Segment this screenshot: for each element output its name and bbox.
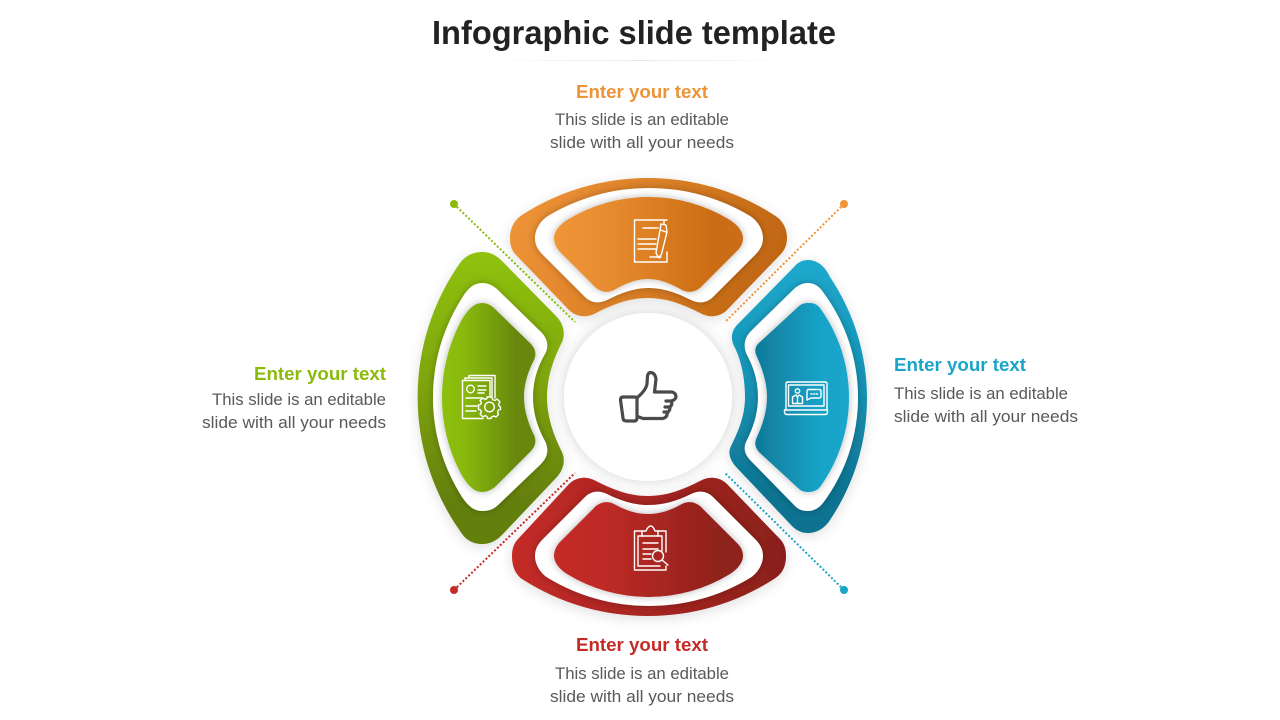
connector: orange dotted line (725, 200, 848, 322)
orange outer band (510, 178, 787, 316)
text block: top orange (550, 82, 734, 152)
title: Infographic slide template (432, 14, 836, 51)
center circle shadow ring (564, 313, 732, 481)
green white ring (433, 283, 547, 511)
text block: right blue: slide with all your needs (894, 407, 1078, 426)
red white ring (535, 492, 763, 606)
text block: left green: This slide is an editable (212, 390, 386, 409)
connector: red dotted line (450, 473, 575, 594)
text block: right blue: Enter your text (894, 355, 1026, 375)
text block: right blue (894, 355, 1078, 426)
red outer band (512, 478, 786, 616)
icon: clipboard with magnifier (634, 526, 668, 570)
icon: document and pen (634, 220, 667, 262)
text block: left green (202, 364, 386, 432)
green inner shape (442, 303, 535, 492)
text block: bottom red: Enter your text (576, 635, 708, 655)
panel: left green (418, 252, 564, 544)
connector: blue dotted line (725, 473, 848, 594)
text block: left green: Enter your text (254, 364, 386, 384)
green outer band (418, 252, 564, 544)
text block: top orange: Enter your text (576, 82, 708, 102)
text block: bottom red: This slide is an editable (555, 664, 729, 683)
panel: bottom red (512, 478, 786, 616)
icon: laptop with presenter (784, 382, 828, 414)
icon: thumbs up (620, 372, 676, 421)
text block: bottom red (550, 635, 734, 706)
orange white ring (535, 188, 763, 302)
blue inner shape (755, 303, 849, 492)
center circle (564, 313, 732, 481)
panel: right blue (729, 260, 867, 533)
text block: right blue: This slide is an editable (894, 384, 1068, 403)
connector: green dotted line (450, 200, 575, 322)
blue outer band (729, 260, 867, 533)
orange inner shape (554, 197, 743, 292)
text block: top orange: slide with all your needs (550, 133, 734, 152)
panel: top orange (510, 178, 787, 316)
icon: documents and gear (462, 376, 500, 418)
text block: bottom red: slide with all your needs (550, 687, 734, 706)
text block: top orange: This slide is an editable (555, 110, 729, 129)
blue white ring (745, 283, 858, 511)
red inner shape (554, 502, 743, 597)
text block: left green: slide with all your needs (202, 413, 386, 432)
